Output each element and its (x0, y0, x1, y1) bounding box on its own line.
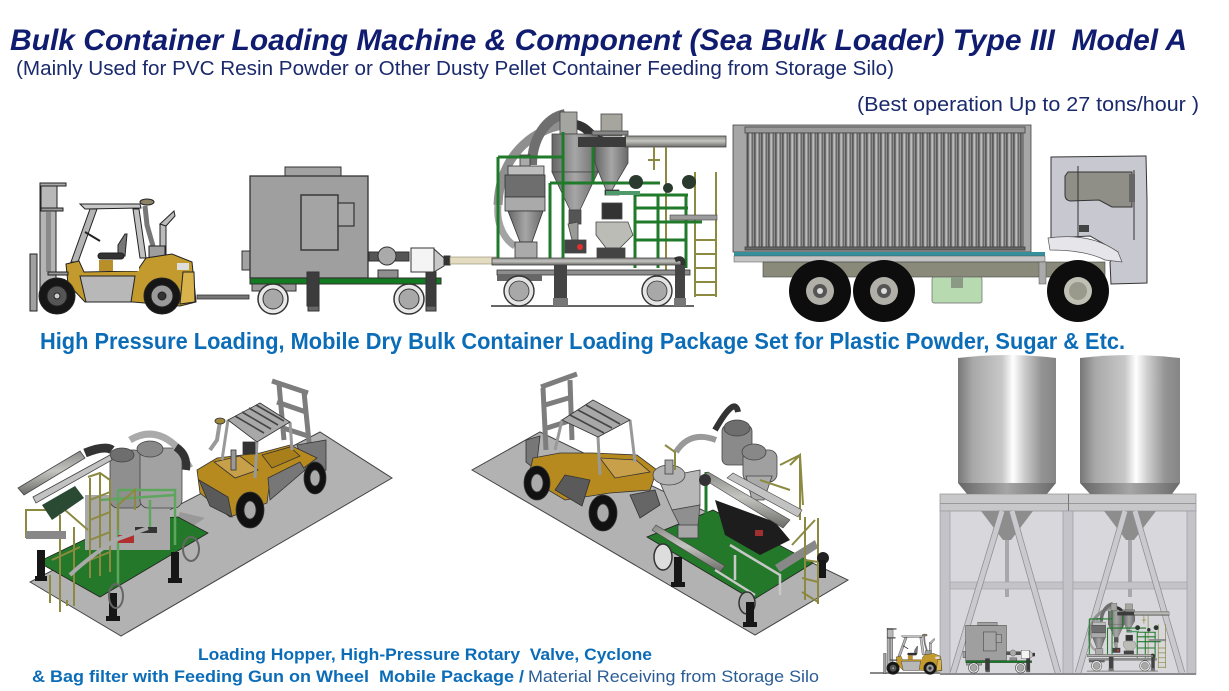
left silo (958, 355, 1056, 494)
green deck (647, 510, 813, 600)
wheels (789, 260, 1109, 322)
package heading: High Pressure Loading, Mobile Dry Bulk Container Loading Package Set for Plastic Powder, Sugar & Etc. (40, 328, 1125, 354)
top discharge pipe (625, 136, 726, 147)
side view: blower trailer (242, 167, 450, 314)
capacity note: (Best operation Up to 27 tons/hour ) (857, 94, 1199, 116)
isometric view: centre package (472, 374, 848, 635)
ground line (870, 672, 940, 674)
caption line 2 continuation: Material Receiving from Storage Silo (528, 667, 819, 686)
small trailer (963, 622, 1035, 673)
isometric view: left package (18, 381, 392, 636)
platform and dark valves (670, 215, 717, 220)
deck (734, 252, 1045, 256)
bag filter (653, 460, 700, 538)
legs and wheels (654, 544, 672, 570)
small forklift (884, 628, 942, 675)
ladder (790, 455, 818, 604)
frames and pipework (704, 472, 708, 545)
silo installation (870, 355, 1196, 675)
forklift (197, 381, 326, 528)
title: Bulk Container Loading Machine & Component (Sea Bulk Loader) Type III Model A (10, 24, 1187, 57)
main pipe and chassis (492, 258, 682, 265)
diagonal braces (953, 511, 1182, 673)
caption line 1: Loading Hopper, High-Pressure Rotary Valve, Cyclone (198, 645, 652, 664)
floor plate (472, 432, 848, 635)
floor plate (30, 432, 392, 636)
cab (1051, 156, 1147, 284)
small loading package (1087, 603, 1169, 671)
package caption (32, 645, 819, 686)
cyclones (552, 112, 633, 258)
side view: forklift (30, 183, 196, 314)
tow bar (197, 295, 249, 299)
container (733, 125, 1031, 252)
curved conveying pipes (498, 114, 605, 246)
forklift (524, 374, 660, 531)
structure and piping detail (100, 490, 175, 585)
chassis (763, 262, 1105, 277)
feed hose (450, 257, 496, 264)
cyclones (722, 420, 777, 500)
side view: container truck (733, 125, 1147, 322)
support structure (940, 494, 1196, 675)
caption line 2: & Bag filter with Feeding Gun on Wheel Mobile Package / (32, 667, 524, 686)
yellow ladder tower (648, 147, 716, 297)
hoppers (981, 511, 1033, 540)
right silo (1080, 355, 1180, 494)
vessels and pipes (18, 434, 190, 550)
green deck and tow hitch (175, 512, 205, 528)
subtitle: (Mainly Used for PVC Resin Powder or Other Dusty Pellet Container Feeding from Storage Silo) (16, 58, 894, 80)
green frame (498, 132, 702, 268)
support legs (35, 550, 182, 621)
bag filter (505, 155, 545, 258)
fuel tank (932, 277, 982, 303)
side view: cyclone and bag filter package (491, 112, 726, 307)
